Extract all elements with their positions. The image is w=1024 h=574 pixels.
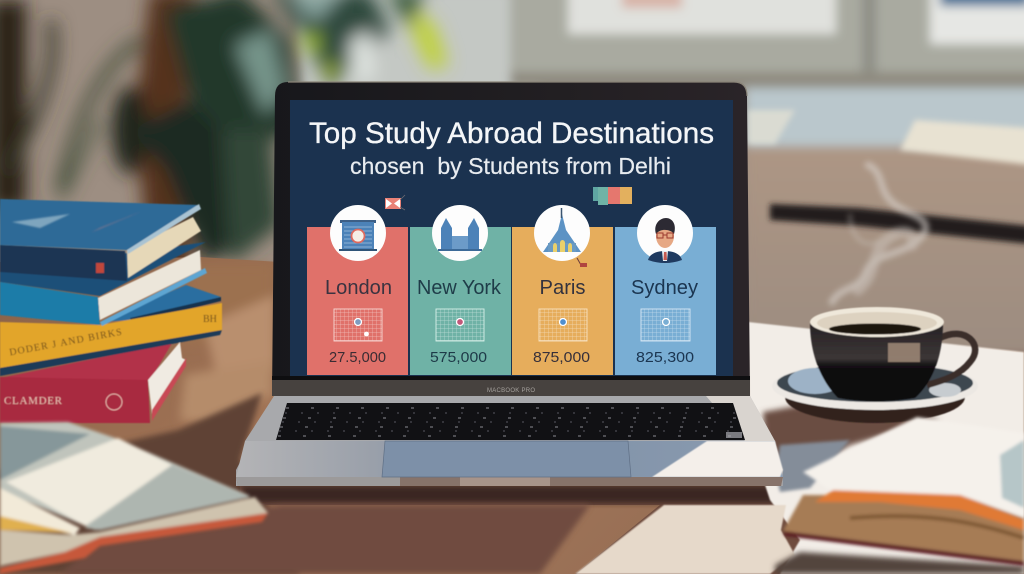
title: Top Study Abroad Destinations — [309, 117, 714, 150]
decoration: colour swatches — [593, 187, 632, 205]
icon: student portrait — [637, 205, 693, 263]
open book: bottom right — [783, 417, 1024, 566]
cup rim — [810, 307, 944, 337]
label: Sydney: Sydney — [631, 276, 699, 299]
icon: London gate — [330, 205, 386, 261]
mini chart: Sydney — [641, 309, 690, 341]
value: Paris: 875,000 — [533, 349, 590, 366]
orange flyleaf — [815, 487, 1024, 530]
icon: New York towers — [432, 205, 488, 261]
decoration: small pin — [577, 258, 587, 267]
icon: Paris church — [534, 205, 590, 261]
navy book — [0, 199, 201, 281]
page block — [783, 495, 1024, 561]
subtitle: chosen by Students from Delhi — [350, 153, 671, 179]
desk: wooden table top — [0, 257, 1024, 574]
yellow book: DODER J AND BIRKS — [9, 327, 123, 358]
teal book — [0, 242, 207, 326]
label: London: London — [325, 276, 392, 299]
red book — [0, 342, 186, 423]
background: blurred plant — [0, 0, 448, 280]
card: Paris — [512, 205, 613, 375]
shaded page corner — [1000, 440, 1024, 508]
value: New York: 575,000 — [430, 349, 487, 366]
open book: bottom left — [0, 422, 268, 574]
card: Sydney — [615, 205, 716, 375]
mini chart: Paris — [539, 309, 587, 341]
steam above the coffee — [832, 165, 926, 302]
value: London: 27.5,000 — [329, 349, 386, 366]
background: wall, window and cabinet — [0, 0, 1024, 356]
stack of books — [0, 199, 222, 423]
cup body — [810, 323, 943, 402]
yellow book: BH — [203, 314, 217, 325]
red book: CLAMDER — [4, 395, 63, 407]
laptop base — [236, 396, 783, 486]
desk: sunlit area on the right — [575, 322, 1024, 574]
card: New York — [410, 205, 511, 375]
laptop — [236, 82, 783, 486]
keyboard — [276, 403, 745, 440]
decoration: small envelope — [385, 195, 405, 210]
reflection on cup — [888, 343, 920, 362]
mini chart: New York — [436, 309, 484, 341]
label: Paris: Paris — [540, 276, 586, 299]
laptop lid — [272, 82, 750, 396]
cup handle — [927, 334, 975, 385]
coffee cup and saucer — [772, 307, 978, 423]
yellow book — [0, 285, 222, 376]
top page — [803, 417, 1024, 517]
screen — [290, 100, 733, 376]
mini chart: London — [334, 309, 382, 341]
card: London — [307, 205, 408, 375]
label: New York: New York — [417, 276, 502, 299]
coffee — [829, 324, 921, 334]
cover edge — [783, 531, 1024, 566]
saucer — [772, 362, 978, 423]
value: Sydney: 825,300 — [636, 349, 694, 366]
laptop lid: MACBOOK PRO — [487, 388, 535, 394]
